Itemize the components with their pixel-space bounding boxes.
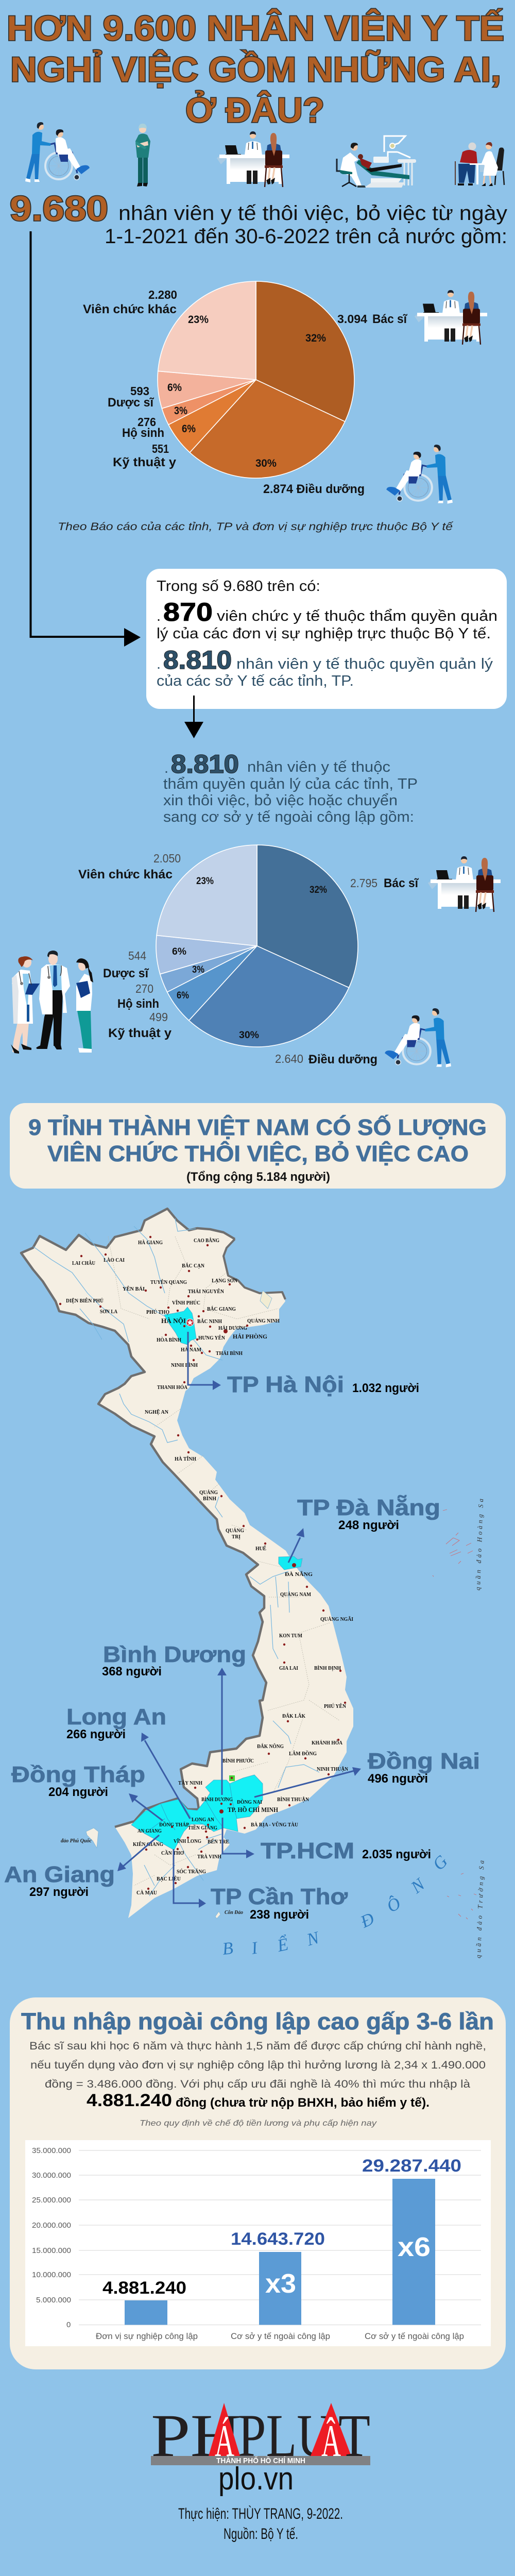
map: province names: TÂY NINH (178, 1780, 202, 1786)
callout: Bình Dương: 368 người (102, 1665, 162, 1679)
callout: Đồng Tháp: 204 người (48, 1785, 108, 1799)
map: province names: ĐỒNG THÁP (159, 1821, 189, 1828)
map: province names: BÌNH THUẬN (277, 1796, 309, 1803)
logo: Pháp Luật: Â (321, 2416, 341, 2466)
map: province names: CÀ MAU (136, 1890, 157, 1896)
icon: surgeon (135, 124, 150, 187)
map: province names: KIÊN GIANG (133, 1841, 163, 1848)
label: Bác sĩ (2): 2.795 (350, 876, 377, 890)
map label: Biển Đông: I (250, 1938, 260, 1958)
pie percentages: provincial staff: 3% (192, 964, 204, 975)
map: province names: BẾN TRE (208, 1838, 229, 1845)
bar value: 29.287.440: 29.287.440 (362, 2156, 461, 2176)
callout: TP Hà Nội (188, 1332, 419, 1397)
map: province names: LÂM ĐỒNG (289, 1750, 317, 1757)
map: province names: YÊN BÁI (123, 1286, 145, 1292)
arrow: from headline to white box (31, 231, 141, 647)
label: Dược sĩ: 593 (130, 384, 149, 398)
title (7, 8, 504, 130)
map: province names: DIỆN BIÊN PHỦ (66, 1297, 104, 1304)
map: province borders (108, 1236, 340, 1886)
logo: Pháp Luật (151, 2402, 370, 2469)
heading total: (Tổng cộng 5.184 người) (186, 1170, 330, 1184)
map: province names: HÒA BÌNH (157, 1337, 181, 1343)
label: Dược sĩ: Dược sĩ (108, 396, 154, 410)
map: northeast border (224, 1239, 285, 1299)
callout: An Giang: 297 người (29, 1885, 89, 1899)
title: HƠN 9.600 NHÂN VIÊN Y TẾ (7, 8, 504, 48)
headline number and intro: nhân viên y tế thôi việc, bỏ việc từ ngày (118, 202, 507, 225)
map: province names: BÌNH DƯƠNG (201, 1797, 233, 1803)
box heading: Trong số 9.680 trên có: (157, 578, 320, 595)
credits: Nguồn: Bộ Y tế. (224, 2526, 298, 2543)
icon: doctor measuring elderly patient (455, 142, 504, 186)
box item: 8.810 (157, 646, 493, 689)
map: province names: LẠNG SƠN (212, 1278, 237, 1284)
callout: TP.HCM: 2.035 người (362, 1848, 431, 1861)
map label: Biển Đông: Ể (275, 1934, 290, 1956)
logo: Pháp Luật: Á (215, 2416, 234, 2466)
map: province names: TRỊ (232, 1534, 241, 1540)
website: plo.vn (218, 2461, 294, 2497)
icon: dentist with patient (337, 136, 416, 188)
box item: 870: lý của các đơn vị sự nghiệp trực thuộc Bộ Y tế. (157, 625, 491, 642)
map: province names: ĐẮK NÔNG (257, 1743, 284, 1750)
map: province names: PHÚ YÊN (324, 1703, 346, 1709)
map: province names: TIỀN GIANG (188, 1824, 217, 1831)
bar chart (25, 2140, 491, 2346)
map: province names: KON TUM (279, 1633, 303, 1639)
callout: Đồng Nai: 496 người (368, 1772, 428, 1786)
map: province names: QUẢNG NAM (280, 1591, 312, 1598)
map: province names: QUẢNG (226, 1528, 244, 1534)
label: Viên chức khác (2) (78, 852, 181, 882)
callout: Đồng Nai: Đồng Nai (368, 1749, 480, 1774)
label: Kỹ thuật y (2): Kỹ thuật y (108, 1026, 172, 1040)
map: province names: BÌNH (203, 1496, 216, 1502)
map: Bình Phước enclave (229, 1775, 235, 1781)
credits: Thực hiện: THÙY TRANG, 9-2022. (178, 2505, 343, 2522)
map: province names: BẠC LIÊU (157, 1876, 181, 1882)
label: Viên chức khác: Viên chức khác (83, 302, 177, 316)
map: province names: AN GIANG (138, 1828, 162, 1834)
income heading: Thu nhập ngoài công lập cao gấp 3-6 lần (21, 2008, 494, 2035)
map: province names: QUẢNG NINH (247, 1318, 280, 1324)
label: Hộ sinh (2) (117, 982, 159, 1011)
map: city dots (59, 1236, 346, 1890)
callout: An Giang: An Giang (4, 1862, 115, 1887)
pie percentages: all staff: 23% (188, 314, 209, 326)
text block: 8.810 explanation (163, 750, 418, 825)
panel: provinces heading: VIÊN CHỨC THÔI VIỆC, BỎ VIỆC CAO (47, 1140, 469, 1166)
heading text: 9 TỈNH THÀNH VIỆT NAM CÓ SỐ LƯỢNG (28, 1114, 487, 1140)
map: province names: CẦN THƠ (161, 1850, 184, 1856)
icon: three medical staff (11, 951, 93, 1054)
map: province names: PHÚ THỌ (146, 1309, 169, 1315)
map: province names: BÌNH ĐỊNH (314, 1665, 341, 1671)
label: Kỹ thuật y (113, 442, 177, 469)
label: Bác sĩ: 3.094 (337, 312, 367, 326)
callout: TP Cần Thơ: TP Cần Thơ (211, 1884, 348, 1909)
icon: wheelchair near second pie (385, 1008, 451, 1067)
logo: Pháp Luật: THÀNH PHỐ HỒ CHÍ MINH (216, 2456, 305, 2465)
source caption: Theo Báo cáo của các tỉnh, TP và đơn vị sự nghiệp trực thuộc Bộ Y tế (58, 521, 454, 533)
label: Hộ sinh (122, 415, 164, 440)
map: province names: QUẢNG NGÃI (320, 1616, 353, 1622)
map: province names: đảo Phú Quốc (61, 1838, 92, 1844)
callout: Long An: 266 người (66, 1727, 126, 1741)
chart y axis: 5.000.000 (36, 2296, 71, 2304)
label: Viên chức khác (83, 288, 177, 316)
callout: Đồng Tháp (11, 1762, 163, 1821)
income source note: Theo quy định về chế độ tiền lương và phụ cấp hiện nay (140, 2119, 377, 2128)
pie percentages: provincial staff (172, 876, 327, 1041)
icon: doctor desk near pie (415, 290, 487, 345)
map label: Biển Đông (221, 1852, 452, 1959)
pie percentages: all staff: 32% (305, 332, 326, 344)
pie percentages: all staff: 6% (167, 382, 182, 394)
headline number and intro: 9.680 (10, 189, 108, 228)
label: Dược sĩ (2) (103, 949, 149, 980)
callout: Đồng Nai (254, 1749, 480, 1797)
bar value: 14.643.720: 14.643.720 (231, 2229, 325, 2249)
label: Kỹ thuật y (2): 499 (149, 1010, 168, 1024)
income description: đồng (chưa trừ nộp BHXH, bảo hiểm y tế). (176, 2096, 430, 2110)
label: Viên chức khác (2): 2.050 (153, 852, 181, 865)
map: province names: BẮC NINH (197, 1318, 222, 1325)
callout: TP Cần Thơ (174, 1849, 348, 1922)
bar value: 4.881.240: 4.881.240 (102, 2278, 186, 2298)
box item: 870 (157, 598, 497, 642)
text block: 8.810 explanation: nhân viên y tế thuộc (247, 759, 390, 775)
callout: TP.HCM (222, 1818, 431, 1863)
map label: Biển Đông: Đ (357, 1909, 377, 1932)
label: Hộ sinh: 276 (138, 415, 156, 429)
map: province names: TP. HỒ CHÍ MINH (228, 1806, 278, 1814)
text block: 8.810 explanation: sang cơ sở y tế ngoài công lập gồm: (163, 809, 414, 825)
label: Viên chức khác (2): Viên chức khác (78, 868, 173, 882)
label: Bác sĩ (2): Bác sĩ (384, 876, 419, 890)
map: highlighted province Đà Nẵng (279, 1556, 302, 1570)
callout: Long An (66, 1704, 190, 1819)
text block: 8.810 explanation: thẩm quyền quản lý của các tỉnh, TP (163, 776, 418, 792)
callout: Long An: Long An (66, 1704, 166, 1730)
map: province names: SƠN LA (100, 1309, 117, 1315)
pie percentages: provincial staff: 32% (310, 885, 327, 895)
panel: white breakdown box (146, 569, 507, 709)
pie chart: provincial staff (156, 845, 358, 1047)
map: province names: VĨNH PHÚC (172, 1300, 200, 1306)
chart bars (125, 2179, 435, 2325)
panel: income comparison (10, 1997, 506, 2369)
map: island markings (433, 1510, 476, 1919)
logo: Pháp Luật: PH (151, 2402, 242, 2469)
icon: doctor desk near second pie (428, 856, 501, 912)
icon: doctor at desk with patient (217, 131, 289, 187)
headline number and intro (10, 189, 507, 248)
chart categories: Cơ sở y tế ngoài công lập (365, 2331, 464, 2341)
label: Dược sĩ (108, 384, 154, 410)
map: province names: KHÁNH HÒA (312, 1740, 342, 1746)
pie percentages: provincial staff: 23% (196, 876, 214, 887)
map: province names: LONG AN (192, 1817, 214, 1823)
callout: TP Hà Nội: 1.032 người (352, 1381, 419, 1395)
callout: Bình Dương: Bình Dương (103, 1642, 246, 1667)
income description (29, 2040, 486, 2110)
map label: Biển Đông: Ô (383, 1893, 404, 1917)
map marker: Hà Nội capital star (186, 1319, 194, 1326)
chart y axis: 20.000.000 (32, 2221, 71, 2230)
map: Vietnam landmass (21, 1209, 353, 1918)
map label: Biển Đông: B (221, 1939, 234, 1959)
panel: provinces heading (10, 1103, 506, 1189)
map: highlighted southern provinces (131, 1775, 263, 1850)
map: highlighted province divisions (145, 1784, 237, 1834)
map: province names: NGHỆ AN (145, 1409, 168, 1415)
map: province names: SÓC TRĂNG (177, 1869, 206, 1875)
label: Điều dưỡng: 2.874 Điều dưỡng (263, 482, 365, 496)
chart categories: Cơ sở y tế ngoài công lập (231, 2331, 330, 2341)
map: province names: ĐỒNG NAI (237, 1799, 262, 1805)
income description: Bác sĩ sau khi học 6 năm và thực hành 1,5 năm để được cấp chứng chỉ hành nghề, (29, 2040, 486, 2052)
callout: TP Hà Nội: TP Hà Nội (227, 1372, 344, 1397)
logo: Pháp Luật: PLU (238, 2402, 333, 2469)
text block: 8.810 explanation: xin thôi việc, bỏ việc hoặc chuyển (163, 792, 398, 809)
chart y axis: 30.000.000 (32, 2171, 71, 2180)
label: Bác sĩ: Bác sĩ (372, 312, 407, 326)
credits (178, 2505, 343, 2543)
map: province names: HƯNG YÊN (198, 1335, 225, 1341)
pie percentages: provincial staff: 6% (177, 990, 189, 1001)
box item: 870: 870 (163, 598, 213, 626)
title: NGHỈ VIỆC GỒM NHỮNG AI, (10, 49, 501, 89)
map: province names: HẢI DƯƠNG (218, 1325, 247, 1331)
callout: TP Cần Thơ: 238 người (250, 1908, 309, 1922)
box item: 8.810: nhân viên y tế thuộc quyền quản lý (236, 656, 493, 672)
label: Điều dưỡng (2) (275, 1052, 377, 1066)
label: Viên chức khác: 2.280 (148, 288, 177, 301)
pie percentages: all staff: 6% (182, 423, 196, 435)
icon: nurse with wheelchair (25, 122, 90, 182)
map: province names: QUẢNG (199, 1489, 218, 1496)
chart y axis (32, 2146, 71, 2329)
callout: TP Đà Nẵng: TP Đà Nẵng (297, 1494, 440, 1520)
label: Bác sĩ (2) (350, 876, 419, 890)
multiplier x3: x3 (265, 2269, 296, 2299)
chart y axis: 10.000.000 (32, 2270, 71, 2279)
map: province names: LÀO CAI (104, 1257, 125, 1263)
chart categories: Đơn vị sự nghiệp công lập (96, 2331, 198, 2341)
chart categories (96, 2331, 464, 2341)
map: province names: CAO BẰNG (194, 1237, 219, 1244)
map: province names: LAI CHÂU (72, 1260, 95, 1266)
map: province names: TRÀ VINH (197, 1854, 221, 1860)
label: Dược sĩ (2): Dược sĩ (103, 967, 149, 980)
chart y axis: 35.000.000 (32, 2146, 71, 2155)
callout: TP.HCM: TP.HCM (261, 1838, 354, 1863)
map label: quần đảo Hoàng Sa: quần đảo Hoàng Sa (474, 1498, 485, 1590)
map: islands (86, 1291, 272, 1919)
map: rivers (33, 1218, 319, 1896)
map: province names: HUẾ (255, 1545, 266, 1552)
map: province names: THÁI NGUYÊN (188, 1289, 224, 1295)
map: highlighted province Hà Nội (164, 1307, 196, 1345)
chart y axis: 15.000.000 (32, 2246, 71, 2255)
headline number and intro: 1-1-2021 đến 30-6-2022 trên cả nước gồm: (105, 225, 507, 248)
pie percentages: all staff (167, 314, 326, 469)
box item: 870: viên chức y tế thuộc thẩm quyền quản (217, 608, 497, 624)
label: Hộ sinh (2): 270 (135, 982, 153, 995)
map label: Biển Đông: G (429, 1852, 452, 1874)
callout: Đồng Tháp: Đồng Tháp (11, 1762, 145, 1787)
label: Điều dưỡng (2): Điều dưỡng (308, 1053, 377, 1066)
map: province names: Côn Đảo (225, 1909, 243, 1916)
box item: 8.810: của các sở Y tế các tỉnh, TP. (157, 673, 354, 689)
map: province names: HẢI PHÒNG (233, 1333, 267, 1340)
map: province names: BẮC GIANG (207, 1306, 236, 1312)
map: province names: GIA LAI (279, 1665, 298, 1671)
pie percentages: all staff: 3% (174, 405, 187, 417)
map: province names: NINH THUẬN (317, 1766, 348, 1772)
income description: nếu tuyển dụng vào đơn vị sự nghiệp công lập thì hưởng lương là 2,34 x 1.490.000 (30, 2059, 486, 2071)
chart y axis: 25.000.000 (32, 2196, 71, 2205)
pie percentages: provincial staff: 30% (239, 1030, 259, 1041)
map: province names: HÀ TĨNH (175, 1456, 196, 1462)
pie percentages: provincial staff: 6% (172, 946, 186, 957)
map: province names: THÁI BÌNH (216, 1350, 243, 1357)
pie percentages: all staff: 30% (255, 457, 277, 469)
pie chart: all staff (158, 281, 354, 478)
map: province names: THANH HÓA (157, 1384, 187, 1391)
map: province names: VĨNH LONG (174, 1838, 201, 1844)
label: Kỹ thuật y (2) (108, 1010, 172, 1040)
label: Bác sĩ (337, 312, 407, 326)
title: Ở ĐÂU? (185, 90, 324, 130)
map: province names: HÀ NAM (181, 1347, 202, 1353)
label: Kỹ thuật y: Kỹ thuật y (113, 455, 177, 469)
box item: 8.810: 8.810 (163, 646, 232, 674)
map label: Biển Đông: N (407, 1874, 430, 1897)
label: Hộ sinh: Hộ sinh (122, 426, 164, 440)
income description: đồng = 3.486.000 đồng. Với phụ cấp ưu đãi nghề là 40% thì mức thu nhập là (45, 2078, 470, 2090)
map: province names: BÌNH PHƯỚC (222, 1758, 254, 1764)
logo: Pháp Luật: T (338, 2402, 370, 2469)
arrow: box to second pie (184, 696, 203, 738)
map: province names (61, 1237, 353, 1916)
box item: 870: . (157, 608, 161, 624)
map: province names: BẮC CẠN (182, 1262, 204, 1269)
callout: TP Đà Nẵng (288, 1494, 440, 1563)
box item: 8.810: . (157, 656, 161, 672)
income description: 4.881.240 (87, 2091, 172, 2110)
label: Kỹ thuật y: 551 (152, 442, 169, 455)
callout: An Giang (4, 1835, 159, 1899)
map: province names: ĐÀ NẴNG (285, 1571, 313, 1578)
callout: TP Đà Nẵng: 248 người (338, 1518, 399, 1532)
multiplier x6: x6 (398, 2232, 431, 2262)
map: province names: TUYÊN QUANG (150, 1279, 187, 1285)
map: province names: HÀ GIANG (138, 1240, 163, 1246)
map: province names: BÀ RỊA - VŨNG TÀU (251, 1822, 298, 1828)
text block: 8.810 explanation: 8.810 (171, 750, 239, 778)
label: Điều dưỡng (2): 2.640 (275, 1052, 303, 1065)
map: province names: NINH BÌNH (171, 1362, 198, 1368)
text block: 8.810 explanation: . (164, 760, 168, 776)
map: province names: HÀ NỘI (161, 1317, 186, 1325)
map label: Biển Đông: N (304, 1928, 322, 1950)
map: province names: ĐẮK LẮK (282, 1713, 305, 1719)
label: Hộ sinh (2): Hộ sinh (117, 997, 159, 1011)
callout: Bình Dương (102, 1642, 246, 1795)
map label: quần đảo Trường Sa: quần đảo Trường Sa (474, 1860, 486, 1958)
map: land border (21, 1209, 266, 1827)
chart y axis: 0 (66, 2320, 71, 2329)
icon: wheelchair near pie (386, 445, 453, 504)
label: Dược sĩ (2): 544 (128, 949, 146, 962)
